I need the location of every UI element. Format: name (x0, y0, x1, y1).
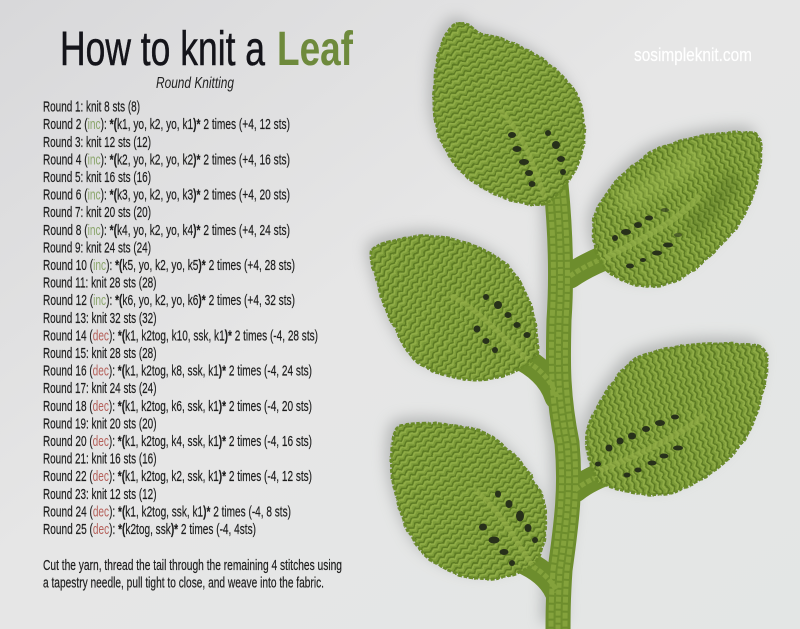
pattern instructions list: Round 7: knit 20 sts (20) (43, 205, 151, 221)
finishing note: a tapestry needle, pull tight to close, and weave into the fabric. (43, 576, 324, 592)
pattern instructions list: Round 22 (dec): *(k1, k2tog, k2, ssk, k1)* 2 times (-4, 12 sts) (43, 469, 312, 485)
pattern instructions list: Round 13: knit 32 sts (32) (43, 311, 156, 327)
pattern instructions list (43, 100, 318, 538)
pattern instructions list: Round 14 (dec): *(k1, k2tog, k10, ssk, k1)* 2 times (-4, 28 sts) (43, 328, 318, 344)
leaf: upper right (593, 132, 761, 286)
finishing note: Cut the yarn, thread the tail through the remaining 4 stitches using (43, 558, 342, 574)
pattern instructions list: Round 9: knit 24 sts (24) (43, 240, 151, 256)
leaf: middle left (371, 236, 538, 380)
pattern instructions list: Round 4 (inc): *(k2, yo, k2, yo, k2)* 2 times (+4, 16 sts) (43, 152, 290, 168)
leaf: bottom left (391, 423, 546, 579)
knitted stem with branches (515, 185, 625, 629)
finishing note (43, 558, 342, 592)
pattern instructions list: Round 10 (inc): *(k5, yo, k2, yo, k5)* 2 times (+4, 28 sts) (43, 258, 295, 274)
pattern instructions list: Round 12 (inc): *(k6, yo, k2, yo, k6)* 2 times (+4, 32 sts) (43, 293, 295, 309)
pattern instructions list: Round 17: knit 24 sts (24) (43, 381, 156, 397)
pattern instructions list: Round 8 (inc): *(k4, yo, k2, yo, k4)* 2 times (+4, 24 sts) (43, 223, 290, 239)
pattern instructions list: Round 6 (inc): *(k3, yo, k2, yo, k3)* 2 times (+4, 20 sts) (43, 188, 290, 204)
leaf: top (434, 23, 584, 205)
pattern instructions list: Round 5: knit 16 sts (16) (43, 170, 151, 186)
pattern instructions list: Round 2 (inc): *(k1, yo, k2, yo, k1)* 2 times (+4, 12 sts) (43, 117, 290, 133)
pattern instructions list: Round 24 (dec): *(k1, k2tog, ssk, k1)* 2 times (-4, 8 sts) (43, 504, 291, 520)
pattern instructions list: Round 20 (dec): *(k1, k2tog, k4, ssk, k1)* 2 times (-4, 16 sts) (43, 434, 312, 450)
title: How to knit a (60, 23, 265, 76)
pattern instructions list: Round 25 (dec): *(k2tog, ssk)* 2 times (-4, 4sts) (43, 522, 256, 538)
pattern instructions list: Round 19: knit 20 sts (20) (43, 416, 156, 432)
pattern instructions list: Round 1: knit 8 sts (8) (43, 100, 140, 116)
pattern instructions list: Round 21: knit 16 sts (16) (43, 452, 156, 468)
website credit: sosimpleknit.com (634, 45, 752, 65)
pattern instructions list: Round 18 (dec): *(k1, k2tog, k6, ssk, k1)* 2 times (-4, 20 sts) (43, 399, 312, 415)
pattern instructions list: Round 11: knit 28 sts (28) (43, 276, 156, 292)
leaf: lower right (587, 344, 767, 494)
pattern instructions list: Round 15: knit 28 sts (28) (43, 346, 156, 362)
title: Leaf (277, 23, 354, 76)
subtitle: Round Knitting (156, 75, 234, 92)
shadows (366, 17, 762, 623)
pattern instructions list: Round 3: knit 12 sts (12) (43, 135, 151, 151)
pattern instructions list: Round 16 (dec): *(k1, k2tog, k8, ssk, k1)* 2 times (-4, 24 sts) (43, 364, 312, 380)
pattern instructions list: Round 23: knit 12 sts (12) (43, 487, 156, 503)
